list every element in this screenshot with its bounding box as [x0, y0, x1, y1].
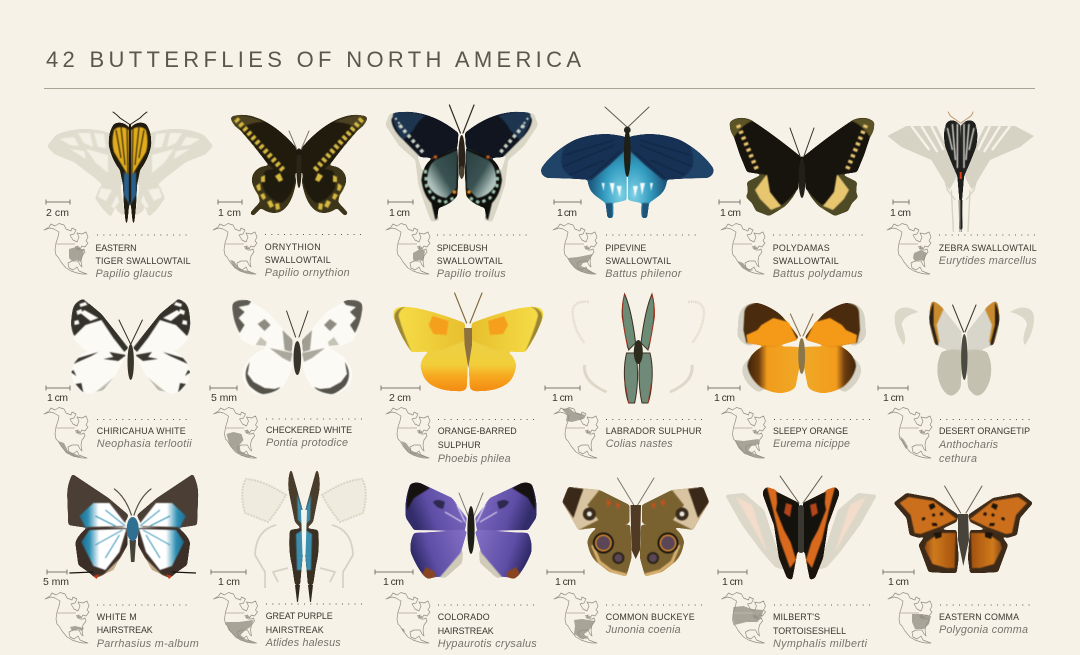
panel: orange-barred sulphur	[381, 293, 543, 465]
scale bar: 1 cm	[883, 392, 904, 404]
species label: TIGER SWALLOWTAIL	[96, 256, 191, 266]
species label: ORANGE-BARRED	[438, 426, 517, 436]
species label: Eurytides marcellus	[939, 255, 1037, 267]
species label: cethura	[939, 453, 977, 465]
butterfly: pipevine swallowtail	[541, 107, 713, 218]
butterfly: ornythion swallowtail	[231, 115, 367, 216]
panel: desert orangetip	[878, 302, 1035, 465]
species label	[605, 235, 701, 280]
species label: EASTERN COMMA	[939, 612, 1019, 622]
species label: SPICEBUSH	[437, 243, 488, 253]
panel: colorado hairstreak	[375, 483, 537, 650]
species label: CHIRICAHUA WHITE	[97, 426, 186, 436]
scale bar	[554, 200, 581, 219]
species label	[605, 605, 702, 636]
species label: WHITE M	[97, 612, 137, 622]
panel: white m hairstreak	[43, 474, 199, 650]
panel: great purple hairstreak	[211, 468, 366, 649]
butterfly: eastern comma	[894, 486, 1033, 573]
scale bar	[210, 386, 237, 404]
species label: SWALLOWTAIL	[605, 256, 671, 266]
species label: SWALLOWTAIL	[265, 255, 331, 265]
butterfly: chiricahua white	[70, 299, 191, 394]
scale bar	[890, 200, 911, 219]
range map	[44, 224, 88, 274]
range map	[214, 592, 258, 643]
species label: POLYDAMAS	[773, 243, 830, 253]
species label: Hypaurotis crysalus	[438, 638, 537, 650]
species label: MILBERT'S	[773, 612, 820, 622]
species label: Papilio troilus	[437, 268, 506, 280]
range map	[553, 224, 597, 274]
panel: pipevine swallowtail	[541, 107, 713, 280]
butterfly: labrador sulphur	[573, 294, 704, 403]
species label: EASTERN	[96, 243, 136, 253]
scale bar: 1 cm	[890, 207, 911, 219]
scale bar: 1 cm	[389, 207, 410, 219]
range map	[386, 592, 430, 643]
scale bar	[719, 200, 741, 219]
butterfly: common buckeye	[562, 478, 709, 576]
scale bar	[46, 200, 70, 219]
panel: common buckeye	[547, 478, 709, 643]
scale bar	[43, 570, 69, 588]
butterfly: desert orangetip	[895, 302, 1034, 396]
butterfly: milbert's tortoiseshell	[725, 476, 877, 580]
species label: Papilio ornythion	[265, 267, 350, 279]
species label: SULPHUR	[438, 440, 481, 450]
scale bar	[708, 386, 740, 404]
scale bar	[547, 570, 584, 588]
species label	[97, 605, 199, 650]
range map	[888, 592, 932, 643]
species label	[939, 235, 1037, 267]
species label: GREAT PURPLE	[266, 611, 333, 621]
range map	[214, 408, 258, 458]
species label: SWALLOWTAIL	[773, 256, 839, 266]
species label	[773, 605, 870, 650]
butterfly: checkered white	[232, 300, 362, 395]
scale bar	[218, 200, 242, 219]
butterfly: white m hairstreak	[67, 474, 198, 579]
species label	[438, 605, 537, 650]
panel: chiricahua white	[44, 299, 192, 458]
species label: HAIRSTREAK	[97, 625, 153, 635]
scale bar: 1 cm	[888, 576, 909, 588]
species label: COMMON BUCKEYE	[606, 612, 695, 622]
range map	[386, 408, 430, 458]
species label: ZEBRA SWALLOWTAIL	[939, 243, 1037, 253]
panel: eastern tiger swallowtail	[44, 112, 213, 280]
species label: DESERT ORANGETIP	[939, 426, 1030, 436]
panel: milbert's tortoiseshell	[718, 476, 877, 650]
species label	[938, 420, 1035, 465]
butterfly: spicebush swallowtail	[385, 105, 538, 222]
species label: COLORADO	[438, 612, 490, 622]
species label	[438, 420, 534, 465]
species label: Junonia coenia	[605, 624, 681, 636]
butterfly: zebra swallowtail	[887, 112, 1034, 232]
species label: HAIRSTREAK	[438, 626, 494, 636]
range map	[887, 224, 931, 274]
title: 42 BUTTERFLIES OF NORTH AMERICA	[46, 47, 581, 72]
panel: sleepy orange	[708, 303, 870, 458]
species label: Nymphalis milberti	[773, 638, 868, 650]
species label: Battus polydamus	[773, 268, 863, 280]
scale bar	[718, 570, 747, 588]
panel: checkered white	[210, 300, 362, 458]
species label: SWALLOWTAIL	[437, 256, 503, 266]
species label: Atlides halesus	[265, 637, 341, 649]
panel: ornythion swallowtail	[213, 115, 367, 279]
scale bar: 1 cm	[722, 576, 743, 588]
scale bar: 1 cm	[720, 207, 741, 219]
scale bar: 1 cm	[218, 207, 241, 219]
butterfly: great purple hairstreak	[242, 468, 366, 602]
scale bar: 5 mm	[211, 392, 237, 404]
species label: CHECKERED WHITE	[266, 425, 352, 435]
scale bar: 1 cm	[47, 392, 68, 404]
species label: TORTOISESHELL	[773, 626, 846, 636]
species label	[265, 604, 362, 649]
scale bar	[545, 386, 580, 404]
species label: SLEEPY ORANGE	[773, 426, 848, 436]
species label: Parrhasius m-album	[97, 638, 199, 650]
scale bar	[46, 386, 70, 404]
species label	[437, 235, 532, 280]
species label	[265, 234, 362, 279]
species label	[939, 605, 1035, 636]
species label	[96, 235, 192, 280]
species label	[266, 419, 362, 449]
species label: Neophasia terlootii	[97, 438, 192, 450]
scale bar: 1 cm	[714, 392, 735, 404]
scale bar: 5 mm	[43, 576, 69, 588]
butterfly: orange-barred sulphur	[393, 293, 543, 391]
scale bar: 1 cm	[552, 392, 573, 404]
scale bar	[381, 386, 420, 404]
panel: polydamas swallowtail	[719, 118, 874, 280]
species label	[606, 420, 702, 450]
range map	[721, 224, 765, 274]
scale bar: 1 cm	[555, 576, 576, 588]
panel: spicebush swallowtail	[385, 105, 538, 280]
range map	[213, 224, 257, 274]
scale bar: 2 cm	[46, 207, 69, 219]
butterfly: eastern tiger swallowtail	[47, 112, 213, 226]
range map	[386, 224, 430, 274]
scale bar	[878, 386, 908, 404]
panel: zebra swallowtail	[887, 112, 1037, 274]
scale bar: 1 cm	[218, 576, 240, 588]
species label	[773, 235, 868, 280]
scale bar: 2 cm	[389, 392, 411, 404]
species label: HAIRSTREAK	[266, 625, 324, 635]
species label: Papilio glaucus	[96, 268, 173, 280]
butterfly: sleepy orange	[737, 303, 866, 393]
species label: Battus philenor	[605, 268, 682, 280]
species label: ORNYTHION	[265, 242, 321, 252]
range map	[722, 592, 766, 643]
species label	[773, 420, 870, 450]
species label: PIPEVINE	[605, 243, 646, 253]
scale bar: 1 cm	[383, 576, 404, 588]
scale bar	[375, 570, 413, 588]
butterfly: colorado hairstreak	[406, 483, 536, 579]
range map	[722, 408, 766, 458]
scale bar	[388, 200, 413, 219]
panel: labrador sulphur	[545, 294, 704, 458]
panel: eastern comma	[883, 486, 1035, 643]
species label: Anthocharis	[938, 439, 999, 451]
species label: Eurema nicippe	[773, 438, 850, 450]
range map	[44, 408, 88, 458]
species label: Pontia protodice	[266, 437, 348, 449]
scale bar: 1 cm	[557, 207, 577, 219]
scale bar	[211, 570, 246, 588]
range map	[45, 592, 89, 643]
range map	[888, 408, 932, 458]
species label: Phoebis philea	[438, 453, 511, 465]
species label: Polygonia comma	[939, 624, 1028, 636]
range map	[554, 408, 598, 458]
butterfly: polydamas swallowtail	[730, 118, 874, 216]
range map	[554, 592, 598, 643]
species label: Colias nastes	[606, 438, 673, 450]
species label	[97, 420, 192, 450]
species label: LABRADOR SULPHUR	[606, 426, 702, 436]
scale bar	[883, 570, 914, 588]
